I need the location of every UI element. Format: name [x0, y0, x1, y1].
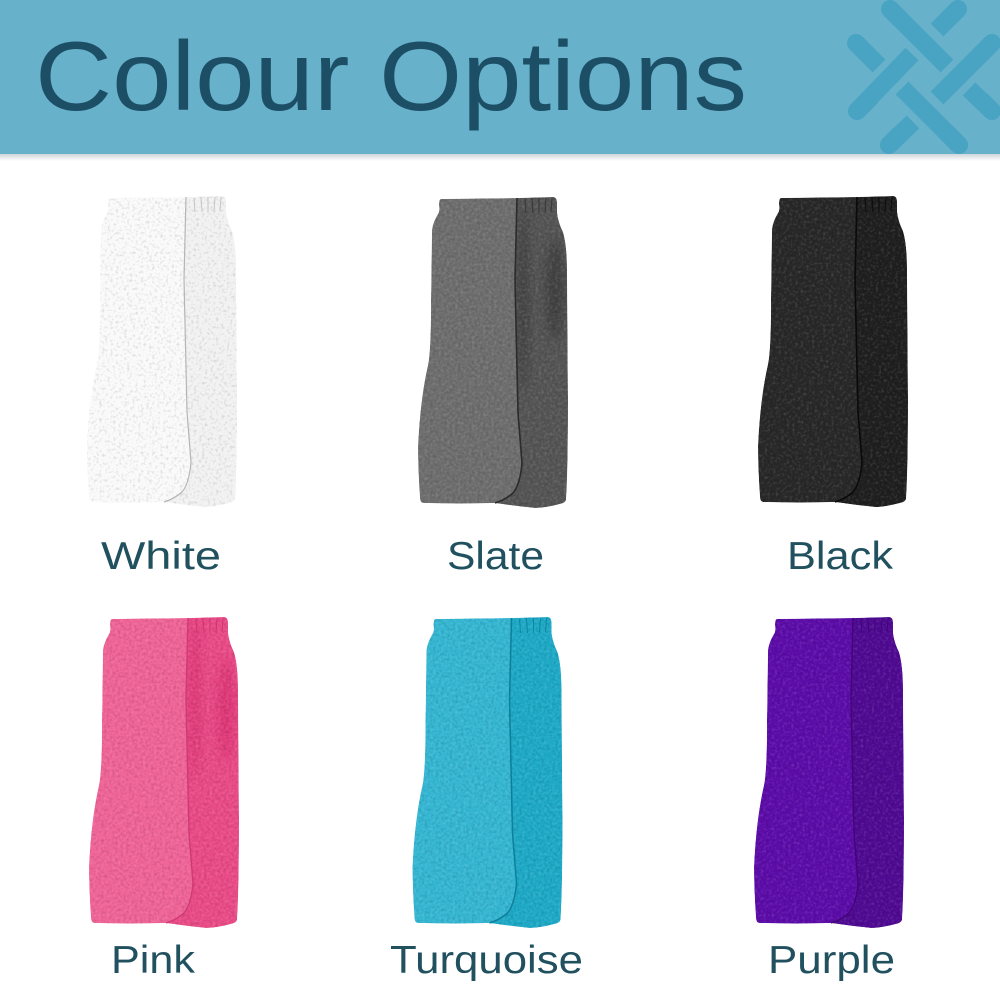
towel: purple [754, 617, 904, 928]
label: Pink: Pink [111, 939, 196, 982]
icon: woven logo [856, 9, 992, 145]
towel: slate [418, 197, 568, 508]
towel: white [87, 196, 237, 507]
towel: black [758, 196, 908, 507]
label: White: White [101, 535, 221, 578]
label: Purple: Purple [768, 939, 895, 982]
towel: turquoise [412, 617, 562, 928]
towel: pink [89, 617, 239, 928]
label: Turquoise: Turquoise [390, 939, 583, 982]
label: Slate: Slate [447, 535, 544, 578]
label: Black: Black [787, 535, 894, 578]
header banner [0, 0, 1000, 161]
title: Colour Options [35, 21, 747, 131]
